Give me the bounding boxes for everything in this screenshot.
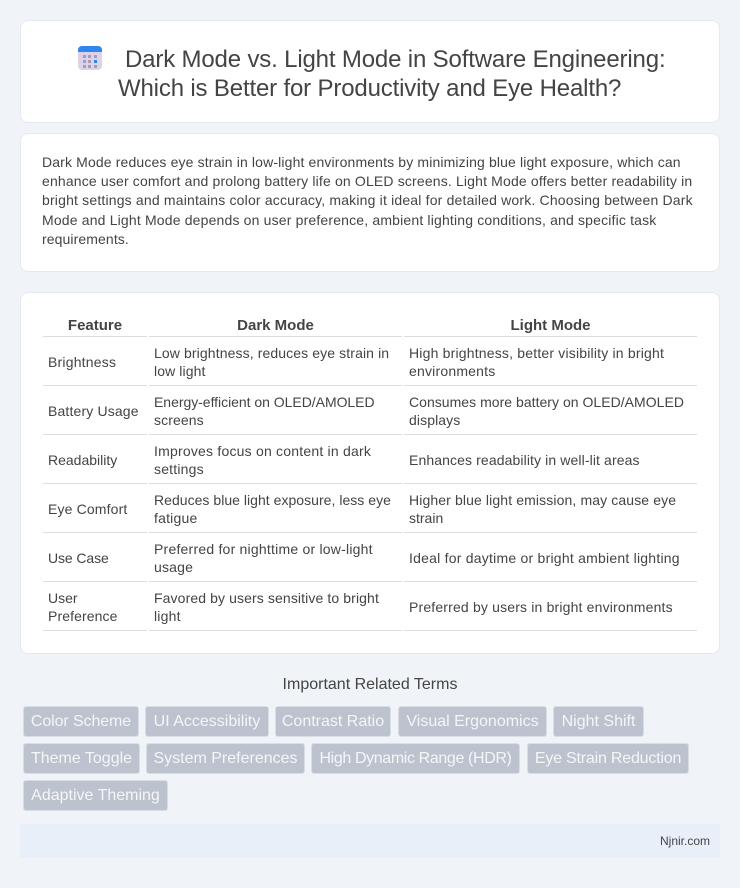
related terms tags: Visual Ergonomics: [406, 713, 539, 730]
summary text: bright settings and maintains color accuracy, making it ideal for detailed work. Choosing between Dark: [42, 192, 693, 208]
row: brightness: low light: [154, 363, 205, 379]
related terms tags: Theme Toggle: [31, 750, 132, 767]
title: Which is Better for Productivity and Eye Health?: [118, 75, 621, 102]
row: eye comfort: fatigue: [154, 510, 197, 526]
related terms tags: Adaptive Theming: [31, 787, 160, 804]
row: eye comfort: Higher blue light emission, may cause eye: [409, 492, 676, 508]
related terms tags: Eye Strain Reduction: [535, 750, 681, 767]
row: readability: Readability: [48, 452, 117, 468]
row: user preference: [48, 590, 673, 624]
related terms tags: Contrast Ratio: [282, 713, 384, 730]
row: readability: [48, 443, 640, 477]
row: user preference: Preference: [48, 608, 117, 624]
row: battery usage: Consumes more battery on OLED/AMOLED: [409, 394, 684, 410]
row: readability: settings: [154, 461, 204, 477]
row: eye comfort: Eye Comfort: [48, 501, 127, 517]
row: user preference: light: [154, 608, 181, 624]
title: [118, 46, 665, 102]
summary text: Mode and Light Mode depends on user preference, ambient lighting conditions, and specific task: [42, 212, 656, 228]
table header: Dark Mode: [237, 317, 314, 334]
related terms tags: System Preferences: [153, 750, 298, 767]
row: user preference: Preferred by users in bright environments: [409, 599, 673, 615]
related terms tags: UI Accessibility: [154, 713, 260, 730]
row: use case: Use Case: [48, 550, 109, 566]
summary text: Dark Mode reduces eye strain in low-light environments by minimizing blue light exposure, which can: [42, 154, 681, 170]
row: readability: Enhances readability in well-lit areas: [409, 452, 640, 468]
row: brightness: [48, 345, 664, 379]
row: use case: [48, 541, 680, 575]
row: use case: Ideal for daytime or bright ambient lighting: [409, 550, 680, 566]
title: Dark Mode vs. Light Mode in Software Engineering:: [125, 46, 665, 73]
related terms tags: [23, 706, 689, 811]
table header: [68, 317, 590, 334]
row: use case: usage: [154, 559, 193, 575]
row: battery usage: screens: [154, 412, 204, 428]
row: user preference: User: [48, 590, 78, 606]
summary text: enhance user comfort and prolong battery life on OLED screens. Light Mode offers better readability in: [42, 173, 692, 189]
row: eye comfort: Reduces blue light exposure, less eye: [154, 492, 391, 508]
row: battery usage: [48, 394, 684, 428]
panel: comparison table: [20, 292, 720, 654]
related terms tags: Night Shift: [562, 713, 635, 730]
summary text: [42, 154, 693, 247]
row: battery usage: Energy-efficient on OLED/AMOLED: [154, 394, 375, 410]
row: user preference: Favored by users sensitive to bright: [154, 590, 379, 606]
row: brightness: environments: [409, 363, 495, 379]
row: battery usage: Battery Usage: [48, 403, 139, 419]
related terms tags: Color Scheme: [31, 713, 131, 730]
row: brightness: Low brightness, reduces eye strain in: [154, 345, 389, 361]
panel: summary: [20, 133, 720, 272]
footer bar: [20, 824, 720, 858]
table header: Light Mode: [510, 317, 590, 334]
row: brightness: High brightness, better visibility in bright: [409, 345, 664, 361]
summary text: requirements.: [42, 231, 129, 247]
icon: calendar: [78, 46, 102, 70]
related terms heading: Important Related Terms: [283, 676, 457, 693]
row: battery usage: displays: [409, 412, 460, 428]
row: readability: Improves focus on content in dark: [154, 443, 371, 459]
row: brightness: Brightness: [48, 354, 116, 370]
footer credit: Njnir.com: [660, 834, 710, 848]
related terms tags: High Dynamic Range (HDR): [319, 750, 512, 767]
row: use case: Preferred for nighttime or low-light: [154, 541, 373, 557]
row: eye comfort: [48, 492, 676, 526]
row: eye comfort: strain: [409, 510, 443, 526]
title card: [20, 20, 720, 123]
table header: Feature: [68, 317, 122, 334]
